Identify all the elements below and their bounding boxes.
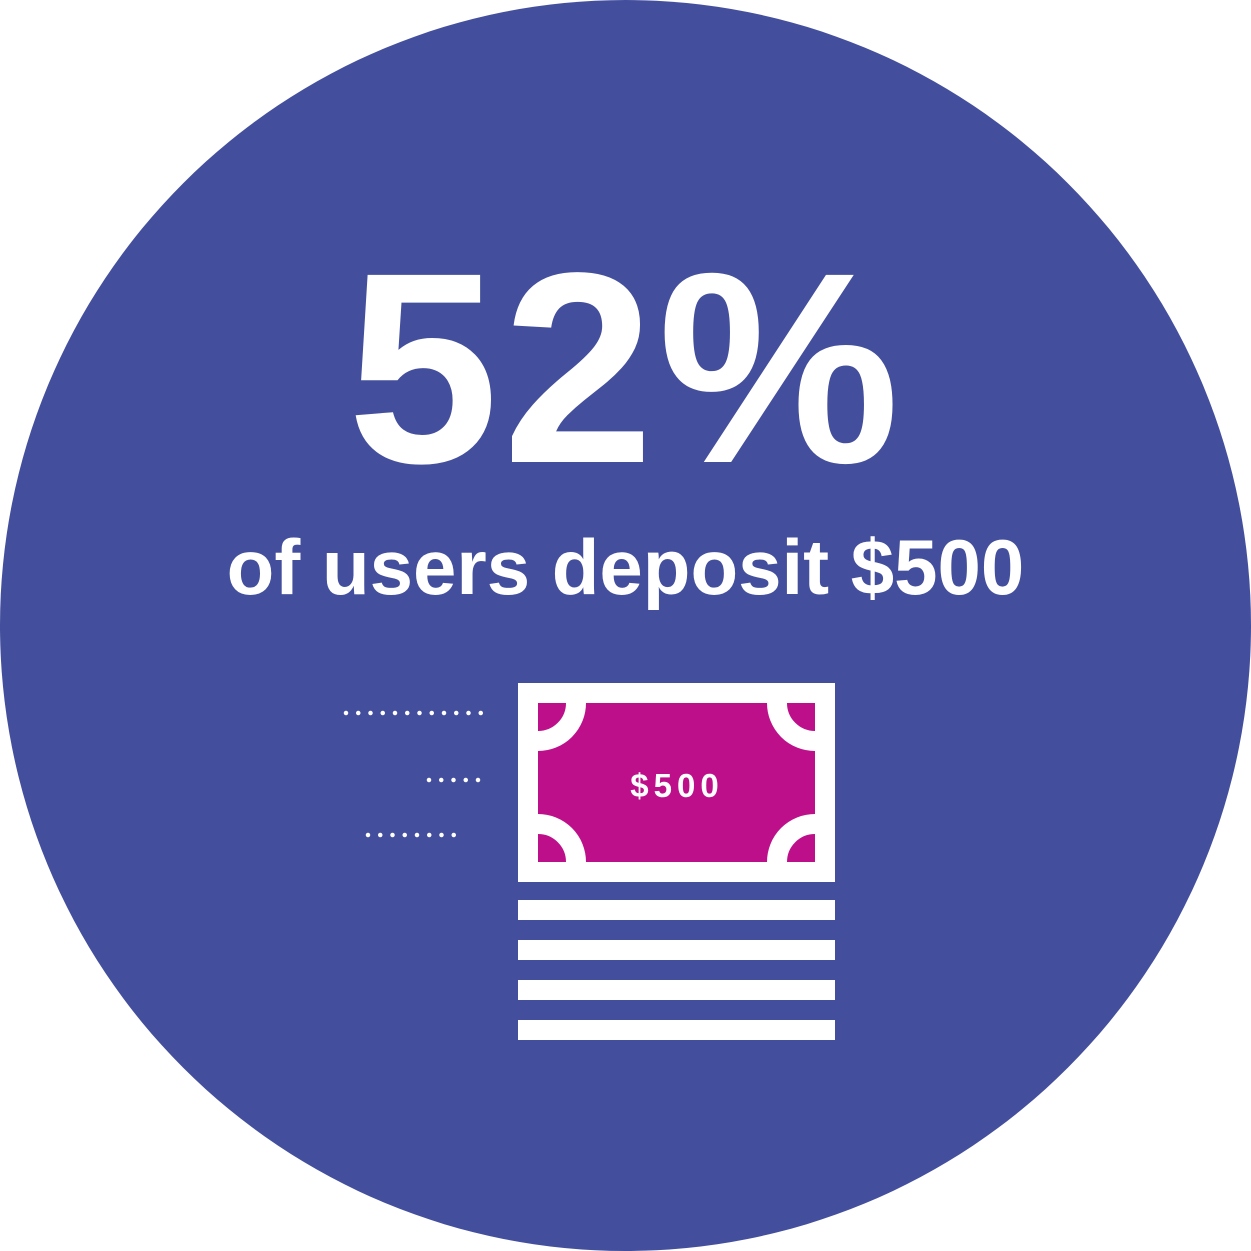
subtitle: of users deposit $500 [227, 523, 1024, 611]
stacked bills lines [518, 900, 835, 1040]
icon: stack of money [344, 683, 835, 1040]
headline: 52%: 52% [347, 216, 904, 520]
bill: $500 [630, 767, 724, 804]
icon: speed dots [346, 713, 493, 835]
bill [518, 683, 835, 882]
